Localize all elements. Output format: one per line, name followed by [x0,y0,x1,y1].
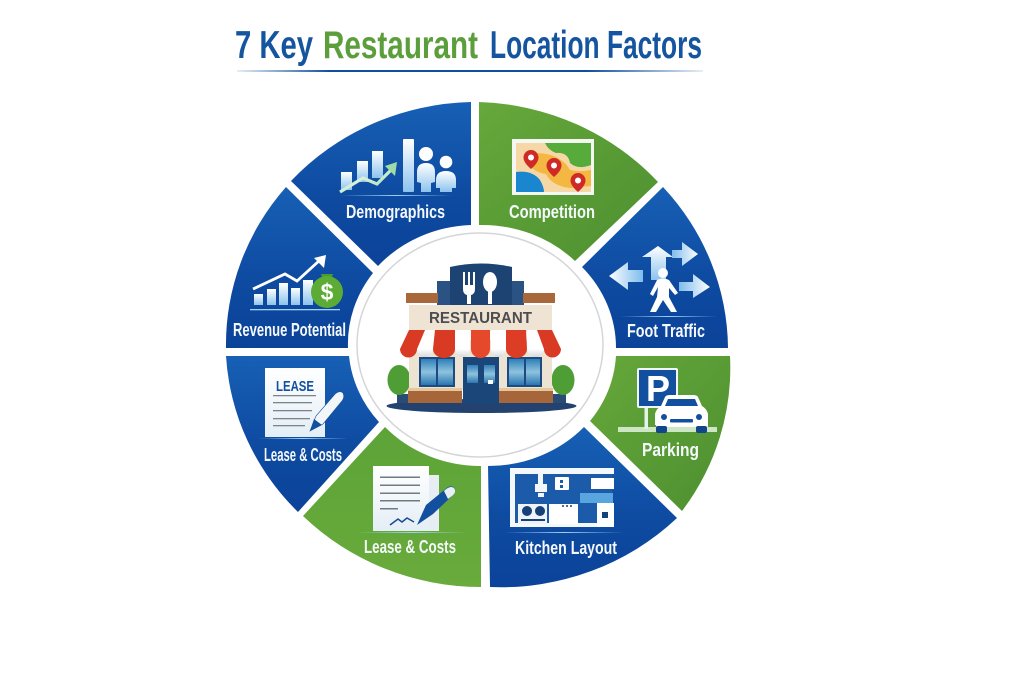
label: foot traffic: Foot Traffic [627,321,705,341]
center circle [357,233,603,457]
label: demographics: Demographics [346,202,445,222]
icon: parking sign and car [618,368,717,433]
icon: parking sign and car: P [646,368,670,409]
label: revenue potential: Revenue Potential [233,320,346,340]
icon: map with pins [512,139,594,195]
title: Restaurant [323,24,478,67]
title: 7 Key [235,24,313,67]
icon: revenue chart and coin: $ [321,279,334,305]
icon: lease document and pen [258,368,348,439]
panel: competition [479,102,658,261]
label: lease and costs blue: Lease & Costs [264,445,342,465]
icon: demographics chart and people [340,139,456,196]
icon: fork and spoon [463,272,497,304]
icon: arrows and pedestrian [609,242,717,317]
panel: lease and costs green [303,427,481,587]
panel: parking [590,356,730,511]
icon: restaurant storefront: RESTAURANT [429,310,532,327]
icon: restaurant storefront [386,264,576,413]
label: kitchen layout: Kitchen Layout [515,538,617,558]
label: parking: Parking [642,440,699,460]
panel: revenue potential [226,187,373,348]
panel: foot traffic [582,187,728,348]
label: lease and costs green: Lease & Costs [364,537,456,557]
icon: kitchen floor plan [504,468,624,533]
panel: kitchen layout [488,427,677,587]
panel: demographics [291,102,471,266]
icon: lease document and pen: LEASE [276,378,314,395]
awning [400,330,561,358]
panel: lease and costs blue [226,356,379,512]
title [235,24,703,72]
icon: revenue chart and coin [250,255,343,310]
title: Location Factors [490,24,702,67]
icon: signed document and pen [357,466,467,533]
label: competition: Competition [509,202,595,222]
